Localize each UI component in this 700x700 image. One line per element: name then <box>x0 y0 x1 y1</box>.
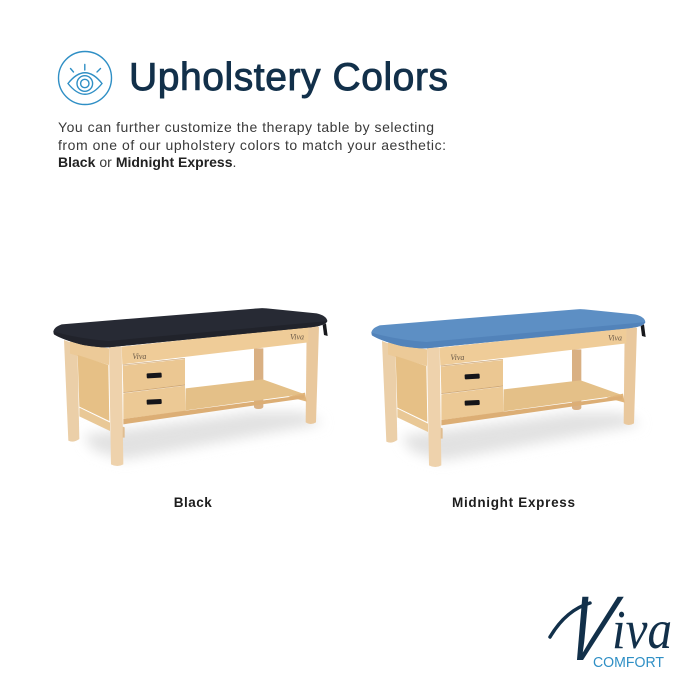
logo: Viva Comfort: COMFORT <box>593 654 664 671</box>
table: black upholstery <box>53 308 328 466</box>
intro text: Midnight Express <box>116 154 233 170</box>
intro text: You can further customize the therapy table by selecting <box>58 119 434 135</box>
intro text: . <box>232 154 236 170</box>
table: midnight express upholstery: Viva <box>608 334 622 343</box>
title: Upholstery Colors <box>129 56 448 99</box>
intro text: Black <box>58 154 96 170</box>
intro text: from one of our upholstery colors to match your aesthetic: <box>58 137 446 153</box>
label: black: Black <box>174 495 212 510</box>
logo: Viva Comfort: iva <box>612 599 672 660</box>
table: black upholstery: Viva <box>290 333 304 342</box>
logo: Viva Comfort: V <box>552 578 631 680</box>
icon: eye in circle <box>58 52 112 104</box>
intro text: or <box>99 154 112 170</box>
label: midnight express: Midnight Express <box>452 495 575 510</box>
table: black upholstery: Viva <box>132 352 146 361</box>
table: midnight express upholstery: Viva <box>450 353 464 362</box>
table: midnight express upholstery <box>371 309 646 467</box>
